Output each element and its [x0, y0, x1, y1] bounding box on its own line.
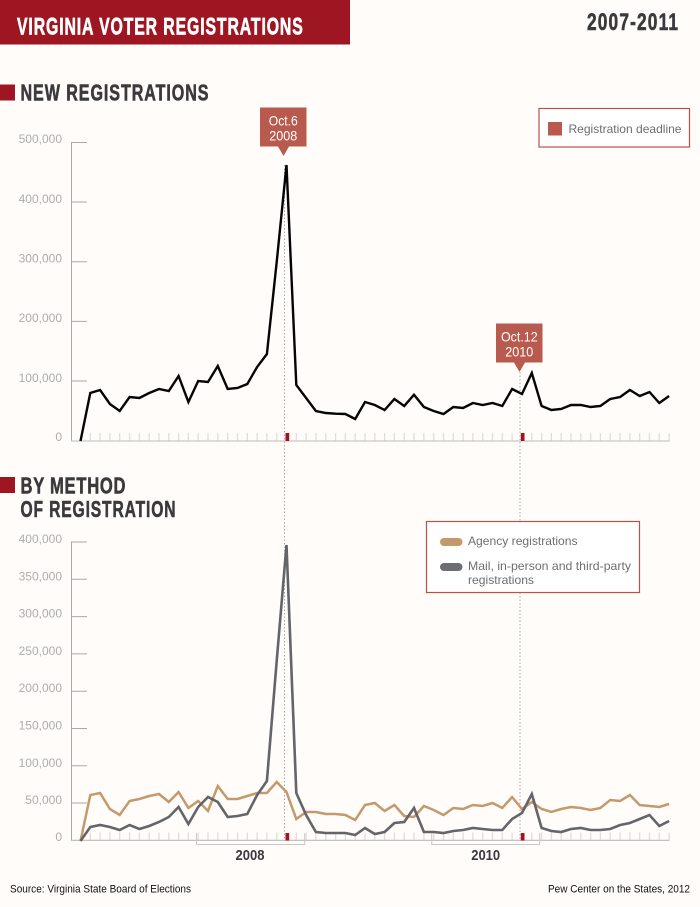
date range: 2007-2011 — [587, 9, 678, 36]
y axis and labels: 100,000 — [19, 371, 62, 385]
deadline marker 2010 — [521, 433, 524, 441]
y axis and labels: 200,000 — [19, 681, 62, 695]
legend item: agency: Agency registrations — [468, 534, 578, 548]
callout: Oct.6 2008 — [260, 108, 306, 156]
year bracket: 2008 — [196, 833, 305, 864]
y axis and labels: 400,000 — [19, 532, 62, 546]
year bracket: 2010 — [432, 833, 540, 864]
y axis and labels: 250,000 — [19, 644, 62, 658]
year bracket: 2008: 2008 — [236, 847, 264, 864]
y axis and labels: 150,000 — [19, 718, 62, 732]
callout: Oct.12 2010 — [496, 324, 542, 372]
heading: by method of registration — [0, 474, 176, 523]
y axis and labels: 50,000 — [25, 793, 62, 807]
deadline marker 2010 — [521, 833, 524, 840]
line: new registrations — [80, 165, 669, 441]
deadline marker 2008 — [286, 433, 289, 441]
chart: by method of registration — [19, 532, 670, 864]
x axis month ticks — [71, 832, 670, 840]
legend: registration deadline — [539, 108, 690, 147]
year bracket: 2010: 2010 — [471, 847, 500, 864]
legend item: mail, in-person and third-party: Mail, in-person and third-party — [468, 559, 631, 573]
deadline guide lines — [284, 165, 520, 840]
y axis and labels — [19, 532, 87, 844]
callout: Oct.6 2008: 2008 — [269, 128, 297, 144]
deadline marker 2008 — [286, 833, 289, 840]
title banner — [0, 0, 350, 44]
chart: new registrations — [19, 132, 670, 444]
x axis month ticks — [71, 433, 670, 441]
legend: registration deadline: Registration deadline — [568, 122, 682, 136]
callout: Oct.12 2010: 2010 — [505, 344, 533, 360]
y axis and labels: 350,000 — [19, 569, 62, 583]
heading: by method of registration: BY METHOD — [20, 474, 125, 499]
y axis and labels: 0 — [55, 430, 62, 444]
y axis and labels: 400,000 — [19, 192, 62, 206]
legend: registration method — [426, 522, 640, 592]
source note: Source: Virginia State Board of Elections — [10, 884, 191, 896]
line: agency registrations — [80, 782, 669, 841]
y axis and labels — [19, 132, 87, 444]
y axis and labels: 300,000 — [19, 607, 62, 621]
legend item: mail, in-person and third-party: registrations — [468, 573, 534, 587]
y axis and labels: 500,000 — [19, 132, 62, 146]
y axis and labels: 300,000 — [19, 252, 62, 266]
title banner: VIRGINIA VOTER REGISTRATIONS — [17, 14, 303, 40]
y axis and labels: 100,000 — [19, 756, 62, 770]
callout: Oct.6 2008: Oct.6 — [269, 112, 298, 128]
line: mail, in-person and third-party registrations — [80, 545, 669, 841]
legend item: mail, in-person and third-party — [440, 559, 631, 587]
heading: by method of registration: OF REGISTRATION — [20, 497, 176, 523]
heading: new registrations: NEW REGISTRATIONS — [20, 81, 209, 106]
credit note: Pew Center on the States, 2012 — [548, 884, 690, 896]
y axis and labels: 200,000 — [19, 311, 62, 325]
y axis and labels: 0 — [55, 830, 62, 844]
callout: Oct.12 2010: Oct.12 — [501, 328, 538, 344]
